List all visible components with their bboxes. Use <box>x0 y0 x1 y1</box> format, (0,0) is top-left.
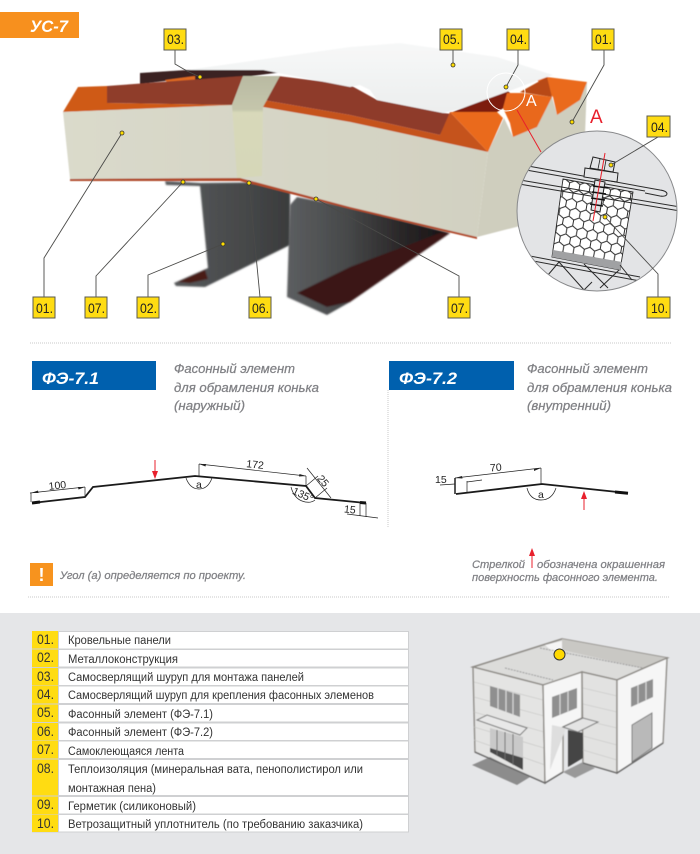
description: ФЭ-7.2: (внутренний) <box>527 399 611 413</box>
dimension 25: 25 <box>314 473 331 490</box>
marker: detail circle A <box>487 73 537 111</box>
callout dots <box>120 63 574 246</box>
description: ФЭ-7.1: (наружный) <box>174 399 245 413</box>
label 05: 05. <box>443 31 460 47</box>
dimension 70: 70 <box>489 462 502 475</box>
entrance left <box>472 715 530 785</box>
wall base line <box>475 743 663 783</box>
dimension 172: 172 <box>246 458 265 472</box>
label 05 <box>440 29 462 50</box>
row 02: Металлоконструкция <box>68 654 178 666</box>
row 10: Ветрозащитный уплотнитель (по требованию заказчика) <box>68 819 363 831</box>
row 06: 06. <box>37 724 54 739</box>
front wall left section <box>543 672 582 783</box>
row 08: Теплоизоляция (минеральная вата, пенополистирол или <box>68 764 363 776</box>
dimension 15: 15 <box>343 503 356 517</box>
label 04: 04. <box>510 31 527 47</box>
label 02 <box>137 297 159 318</box>
marker: red A and connector: A <box>590 107 603 128</box>
label 04 detail: 04. <box>651 119 668 135</box>
label 04 <box>507 29 529 50</box>
label 10: 10. <box>651 300 668 316</box>
label 04 detail <box>647 116 670 137</box>
label 06: 06. <box>252 300 269 316</box>
row 09: 09. <box>37 797 54 812</box>
row 01 <box>32 631 408 649</box>
steel purlin right <box>287 197 450 315</box>
warning note: ! <box>38 565 44 585</box>
red arrow <box>152 460 158 479</box>
label 07 right: 07. <box>451 300 468 316</box>
label 07 left <box>85 297 107 318</box>
orange rib 2 <box>503 93 552 137</box>
description: ФЭ-7.2 <box>527 362 672 413</box>
label 06 <box>249 297 271 318</box>
row 09: Герметик (силиконовый) <box>68 801 196 813</box>
arrow note: поверхность фасонного элемента. <box>472 572 658 584</box>
building marker dot <box>554 649 565 660</box>
label 02: 02. <box>140 300 157 316</box>
panel end face <box>477 82 587 237</box>
steel purlin left <box>165 181 290 287</box>
badge: ФЭ-7.1 <box>32 361 156 390</box>
angle a: a <box>196 479 202 491</box>
orange rib 3 <box>537 77 587 115</box>
dimension 15: 15 <box>435 474 447 486</box>
arrow note <box>472 548 665 584</box>
description: ФЭ-7.1: для обрамления конька <box>174 381 319 395</box>
windows <box>490 686 520 717</box>
label 03 <box>164 29 186 50</box>
row 01: 01. <box>37 632 54 647</box>
door right <box>632 713 652 762</box>
dimension 70 <box>455 462 541 492</box>
dimension 135: 135° <box>290 485 315 505</box>
row 08: 08. <box>37 761 54 776</box>
inner wall <box>582 672 617 773</box>
flashing sheet <box>528 166 667 196</box>
description: ФЭ-7.1 <box>174 362 319 413</box>
marker: detail circle A: A <box>526 93 537 110</box>
row 03: Самосверлящий шуруп для монтажа панелей <box>68 672 304 684</box>
white flashing top <box>187 43 553 113</box>
label 01 left <box>33 297 55 318</box>
insulation block <box>554 180 632 262</box>
row 06: Фасонный элемент (ФЭ-7.2) <box>68 727 213 739</box>
entrance centre <box>563 718 598 778</box>
row 02: 02. <box>37 650 54 665</box>
row 07 <box>32 741 408 758</box>
dimension 100 <box>30 479 85 502</box>
profile drawing: ФЭ-7.1 <box>30 458 378 518</box>
dark fold behind <box>140 67 283 84</box>
orange rib 1 <box>450 112 503 152</box>
angle a <box>186 478 212 491</box>
roof <box>473 639 667 685</box>
row 03: 03. <box>37 669 54 684</box>
dimension 100: 100 <box>48 479 67 493</box>
warning note: Угол (а) определяется по проекту. <box>59 570 246 582</box>
label 01 right: 01. <box>595 31 612 47</box>
dimension 15 <box>343 503 378 518</box>
dark red recess <box>450 90 517 113</box>
badge: ФЭ-7.2 <box>389 361 514 390</box>
arrow note: обозначена окрашенная <box>537 559 665 571</box>
row 04 <box>32 686 408 704</box>
description: ФЭ-7.1: Фасонный элемент <box>174 362 295 376</box>
row 01: Кровельные панели <box>68 635 171 647</box>
row 08: монтажная пена) <box>68 783 156 795</box>
label 10 <box>647 297 670 318</box>
panel top right: orange strip <box>263 100 488 152</box>
row 07: 07. <box>37 742 54 757</box>
badge: ФЭ-7.1: ФЭ-7.1 <box>42 369 99 388</box>
panel top left: brown <box>107 76 243 105</box>
badge: УС-7 <box>0 12 79 38</box>
arrow note: Стрелкой <box>472 559 525 571</box>
row 05: Фасонный элемент (ФЭ-7.1) <box>68 709 213 721</box>
row 07: Самоклеющаяся лента <box>68 746 185 758</box>
panel face <box>63 105 488 237</box>
description: ФЭ-7.2: Фасонный элемент <box>527 362 648 376</box>
angle a <box>527 488 556 501</box>
ridge strip <box>232 76 280 178</box>
screw <box>584 157 618 212</box>
label 01 right <box>592 29 614 50</box>
row 06 <box>32 723 408 740</box>
grey footer panel <box>0 613 700 854</box>
label 01 left: 01. <box>36 300 53 316</box>
row 02 <box>32 650 408 667</box>
detail leaders <box>603 137 658 297</box>
marker: red A and connector <box>517 107 603 152</box>
illustration: roof ridge sandwich panel assembly <box>63 43 587 315</box>
left wall <box>473 667 545 783</box>
angle a: a <box>538 489 544 501</box>
description: ФЭ-7.2: для обрамления конька <box>527 381 672 395</box>
profile drawing: ФЭ-7.2 <box>435 462 628 510</box>
dimension 172 <box>199 458 306 486</box>
row 10 <box>32 814 408 832</box>
detail view: screw and insulation <box>517 131 680 291</box>
badge: УС-7: УС-7 <box>30 17 70 36</box>
panel orange edge under <box>70 177 477 239</box>
row 10: 10. <box>37 816 54 831</box>
row 04: Самосверлящий шуруп для крепления фасонных элеменов <box>68 690 374 702</box>
illustration: building <box>472 639 667 785</box>
panel top left: orange <box>63 86 232 112</box>
lower panel <box>528 256 640 281</box>
warning note <box>30 563 246 586</box>
panel top right: brown <box>263 76 452 135</box>
row 05: 05. <box>37 705 54 720</box>
legend table <box>32 631 409 832</box>
red arrow <box>581 491 587 510</box>
row 09 <box>32 796 408 814</box>
label 07 right <box>448 297 470 318</box>
label 03: 03. <box>167 31 184 47</box>
badge: ФЭ-7.2: ФЭ-7.2 <box>399 369 458 388</box>
callout leader lines <box>44 50 604 297</box>
right wall <box>617 658 667 773</box>
row 04: 04. <box>37 687 54 702</box>
row 03 <box>32 668 408 686</box>
row 05 <box>32 704 408 722</box>
dimension 25 <box>306 468 331 498</box>
dimension 15 <box>435 474 455 486</box>
row 08 <box>32 760 408 796</box>
label 07 left: 07. <box>88 300 105 316</box>
